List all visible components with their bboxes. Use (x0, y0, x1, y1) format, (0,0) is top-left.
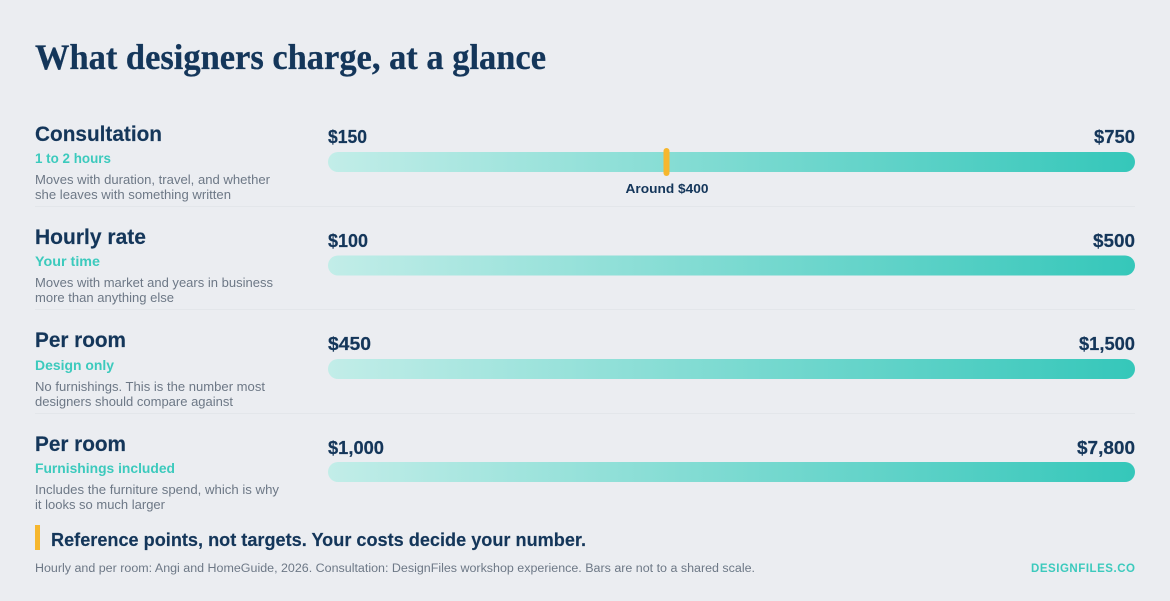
row label: hourly rate: more than anything else (35, 290, 174, 305)
row label: consultation: Moves with duration, travel, and whether (35, 172, 271, 187)
row: per room, design only (35, 329, 1135, 409)
marker label: Around $400 (626, 181, 708, 196)
row label: per room, furnishings included: Furnishings included (35, 460, 175, 476)
row label: per room, design only: designers should compare against (35, 394, 233, 409)
high value: $750: $750 (1094, 127, 1135, 147)
source note: Hourly and per room: Angi and HomeGuide, 2026. Consultation: DesignFiles workshop experience. Bars are not to a shared scale. (35, 563, 755, 575)
row label: hourly rate: Hourly rate (35, 226, 146, 249)
row label: per room, furnishings included: Includes the furniture spend, which is why (35, 482, 279, 497)
row label: per room, furnishings included (35, 433, 279, 512)
row: consultation (35, 123, 1135, 202)
high value: $1,500: $1,500 (1079, 334, 1135, 354)
callout accent bar (35, 525, 40, 550)
low value: $1,000: $1,000 (328, 438, 384, 458)
row label: hourly rate: Moves with market and years in business (35, 275, 273, 290)
row label: per room, design only: Design only (35, 357, 114, 373)
range bar: per room, furnishings included (328, 462, 1135, 482)
range bar: per room, design only (328, 359, 1135, 379)
row: per room, furnishings included (35, 433, 1135, 512)
low value: $450: $450 (328, 334, 371, 354)
callout text: Reference points, not targets. Your costs decide your number. (51, 530, 586, 550)
range bar: hourly rate (328, 256, 1135, 276)
callout (35, 525, 586, 550)
range bar: consultation (328, 152, 1135, 172)
row label: consultation (35, 123, 271, 202)
row label: hourly rate: Your time (35, 253, 100, 269)
brand mark: DESIGNFILES.CO (1031, 563, 1135, 575)
row: hourly rate (35, 226, 1135, 305)
row label: per room, furnishings included: it looks so much larger (35, 497, 166, 512)
row label: consultation: she leaves with something written (35, 187, 231, 202)
low value: $150: $150 (328, 127, 367, 147)
row label: per room, design only: No furnishings. This is the number most (35, 379, 265, 394)
row label: per room, design only (35, 329, 265, 409)
low value: $100: $100 (328, 231, 368, 251)
row label: hourly rate (35, 226, 273, 305)
typical marker (664, 148, 670, 176)
row label: per room, design only: Per room (35, 329, 126, 352)
row label: per room, furnishings included: Per room (35, 433, 126, 456)
row label: consultation: 1 to 2 hours (35, 150, 111, 166)
high value: $500: $500 (1093, 231, 1135, 251)
row label: consultation: Consultation (35, 123, 162, 146)
high value: $7,800: $7,800 (1077, 438, 1135, 458)
title: What designers charge, at a glance (35, 37, 546, 77)
